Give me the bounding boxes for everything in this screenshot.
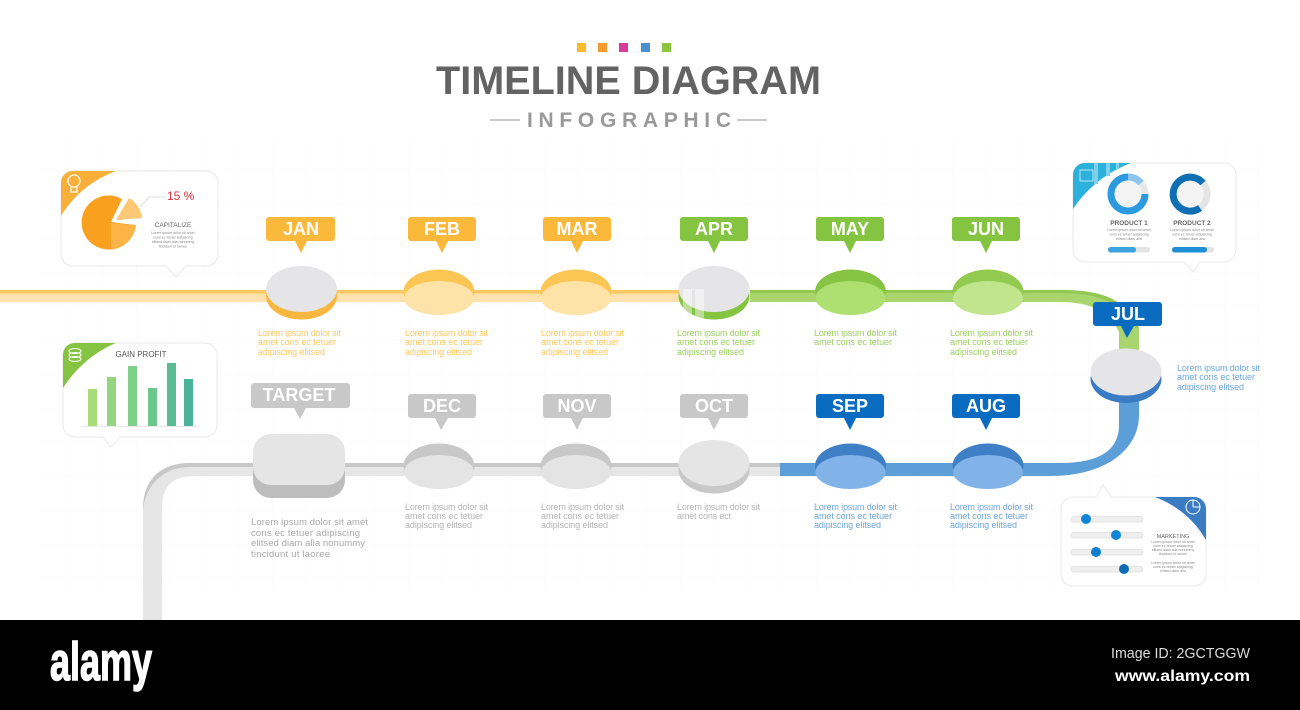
grey timeline track (143, 463, 780, 620)
milestone: June: adipiscing elitsed (950, 347, 1017, 357)
milestone: target: Lorem ipsum dolor sit amet (251, 517, 368, 528)
milestone: May (814, 217, 897, 347)
milestone: April (677, 217, 760, 357)
description: cons ec tetuer adipiscing (1153, 565, 1193, 569)
milestone: February: amet cons ec tetuer (405, 337, 483, 347)
description: product 2 (1170, 228, 1214, 241)
milestone: May: amet cons ec tetuer (814, 337, 892, 347)
description: product 2: cons ec tetuer adipiscing (1172, 232, 1212, 236)
milestone: September: adipiscing elitsed (814, 520, 881, 530)
milestone: May: Lorem ipsum dolor sit (814, 328, 897, 338)
logo: alamy (50, 632, 152, 692)
milestone: June: amet cons ec tetuer (950, 337, 1028, 347)
milestone: target: tincidunt ut laoree (251, 549, 330, 560)
heading: marketing: MARKETING (1157, 534, 1189, 540)
milestone: February: adipiscing elitsed (405, 347, 472, 357)
corner tab (1073, 163, 1131, 209)
milestone: November: Lorem ipsum dolor sit (541, 502, 624, 512)
milestone: April: APR (695, 219, 733, 239)
milestone: November (540, 394, 624, 530)
milestone: August: adipiscing elitsed (950, 520, 1017, 530)
description: product 2: Lorem ipsum dolor sit amet (1170, 228, 1214, 232)
milestone: target (251, 383, 368, 560)
donut: product 1 (1111, 177, 1145, 211)
title: TIMELINE DIAGRAM (436, 59, 821, 103)
description: tincidunt ut laoree (1159, 552, 1187, 556)
description: product 1: Lorem ipsum dolor sit amet (1107, 228, 1151, 232)
value: 15 percent: 15 % (167, 189, 195, 203)
heading: capitalize: CAPITALIZE (155, 222, 192, 229)
milestone: December: adipiscing elitsed (405, 520, 472, 530)
milestone: May: MAY (831, 219, 869, 239)
milestone: December: Lorem ipsum dolor sit (405, 502, 488, 512)
description (151, 231, 195, 248)
milestone: April: amet cons ec tetuer (677, 337, 755, 347)
milestone: March: MAR (556, 219, 598, 239)
description: product 1 (1107, 228, 1151, 241)
milestone: July: JUL (1111, 304, 1145, 324)
milestone: June (950, 217, 1033, 357)
panel: marketing (1061, 485, 1206, 586)
website: www.alamy.com (1114, 668, 1250, 685)
milestone: February (404, 217, 488, 357)
description: Lorem ipsum dolor sit amet (151, 231, 195, 235)
milestone: March: Lorem ipsum dolor sit (541, 328, 624, 338)
donut: product 2 (1173, 177, 1207, 211)
milestone: June: JUN (968, 219, 1004, 239)
corner tab (63, 343, 116, 388)
description (1151, 540, 1195, 573)
milestone: January: JAN (283, 219, 319, 239)
milestone: February: Lorem ipsum dolor sit (405, 328, 488, 338)
bar chart (80, 363, 198, 426)
image id: Image ID: 2GCTGGW (1111, 645, 1251, 662)
sliders (1071, 514, 1143, 574)
label: product 2: PRODUCT 2 (1173, 220, 1211, 227)
milestone: April: Lorem ipsum dolor sit (677, 328, 760, 338)
description: product 1: cons ec tetuer adipiscing (1109, 232, 1149, 236)
colour squares (577, 43, 671, 52)
icon: chart (1080, 170, 1093, 181)
milestone: October: OCT (695, 396, 733, 416)
milestone: June: Lorem ipsum dolor sit (950, 328, 1033, 338)
milestone: December: DEC (423, 396, 461, 416)
milestone: October: amet cons ect (677, 511, 731, 521)
icon: light bulb (68, 175, 80, 192)
footer bar (0, 620, 1300, 710)
icon: coins (69, 348, 81, 362)
milestone: January: Lorem ipsum dolor sit (258, 328, 341, 338)
milestone: July: Lorem ipsum dolor sit (1177, 363, 1260, 373)
description: product 2: elitsed diam alia (1179, 237, 1205, 241)
green timeline track (750, 290, 1139, 350)
milestone: August: AUG (966, 396, 1006, 416)
milestone: September: amet cons ec tetuer (814, 511, 892, 521)
milestone: January: adipiscing elitsed (258, 347, 325, 357)
milestone: March (540, 217, 624, 357)
milestone: July (1090, 302, 1260, 403)
icon: pie (1186, 500, 1200, 514)
milestone: November: amet cons ec tetuer (541, 511, 619, 521)
description: elitsed diam alia nonummy (152, 240, 194, 244)
milestone: August: Lorem ipsum dolor sit (950, 502, 1033, 512)
milestone: February: FEB (424, 219, 460, 239)
description: cons ec tetuer adipiscing (1153, 544, 1193, 548)
milestone: September (814, 394, 897, 530)
milestone: August: amet cons ec tetuer (950, 511, 1028, 521)
progress: product 2 (1172, 247, 1214, 252)
milestone: August (950, 394, 1033, 530)
milestone: October: Lorem ipsum dolor sit (677, 502, 760, 512)
subtitle: INFOGRAPHIC (527, 109, 731, 132)
milestone: target: cons ec tetuer adipiscing (251, 528, 360, 539)
panel: gain profit (63, 343, 217, 447)
milestone: March: adipiscing elitsed (541, 347, 608, 357)
description: elitsed diam alia (1160, 569, 1186, 573)
milestone: December: amet cons ec tetuer (405, 511, 483, 521)
description: tincidunt ut laoree (159, 244, 187, 248)
milestone: January (258, 217, 341, 357)
panel: products (1073, 163, 1236, 272)
milestone: April: adipiscing elitsed (677, 347, 744, 357)
description: Lorem ipsum dolor sit amet (1151, 540, 1195, 544)
milestone: September: Lorem ipsum dolor sit (814, 502, 897, 512)
description: elitsed diam alia nonummy (1152, 548, 1194, 552)
milestone: November: NOV (557, 396, 597, 416)
panel: capitalize (61, 171, 218, 277)
milestone: July: adipiscing elitsed (1177, 382, 1244, 392)
description: Lorem ipsum dolor sit amet (1151, 561, 1195, 565)
milestone: December (404, 394, 488, 530)
pie chart (82, 195, 142, 250)
milestone: January: amet cons ec tetuer (258, 337, 336, 347)
milestone: target: elitsed diam alia nonummy (251, 538, 365, 549)
description: cons ec tetuer adipiscing (153, 236, 193, 240)
heading: gain profit: GAIN PROFIT (115, 350, 167, 359)
corner tab (61, 171, 116, 216)
milestone: July: amet cons ec tetuer (1177, 372, 1255, 382)
milestone: September: SEP (832, 396, 868, 416)
blue timeline track (780, 398, 1139, 476)
yellow timeline track (0, 290, 680, 302)
milestone: October (677, 394, 760, 521)
milestone: target: TARGET (263, 385, 335, 405)
progress: product 1 (1108, 247, 1150, 252)
milestone: November: adipiscing elitsed (541, 520, 608, 530)
label: product 1: PRODUCT 1 (1110, 220, 1148, 227)
corner tab (1155, 497, 1206, 540)
milestone: March: amet cons ec tetuer (541, 337, 619, 347)
tab pattern (1094, 163, 1119, 184)
description: product 1: elitsed diam alia (1116, 237, 1142, 241)
